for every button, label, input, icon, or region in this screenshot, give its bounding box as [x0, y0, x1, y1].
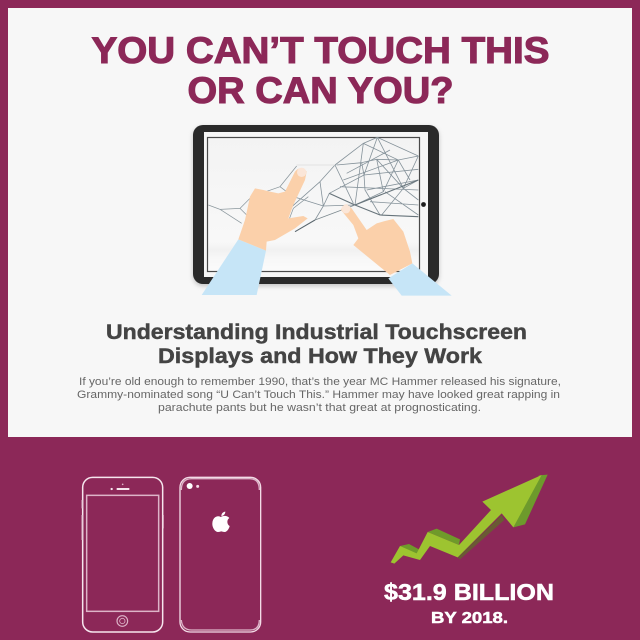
arrow head side	[513, 475, 548, 527]
icon: phone front	[82, 477, 163, 632]
intro paragraph: Grammy-nominated song “U Can’t Touch This.” Hammer may have looked great rapping in	[77, 389, 560, 401]
chart: network mesh left	[208, 166, 315, 232]
intro paragraph: If you’re old enough to remember 1990, that’s the year MC Hammer released his signature,	[79, 376, 561, 388]
panel: white intro	[8, 8, 632, 437]
title: OR CAN YOU?	[188, 70, 454, 111]
icon: phone back	[180, 477, 261, 632]
subtitle: Understanding Industrial Touchscreen	[106, 321, 527, 344]
icon: apple logo	[212, 512, 230, 532]
arrow front	[391, 475, 542, 564]
intro paragraph: parachute pants but he wasn’t that great at prognosticating.	[158, 402, 481, 414]
market stat: $31.9 BILLION	[384, 579, 554, 605]
chart: network mesh right	[290, 137, 418, 220]
title: YOU CAN’T TOUCH THIS	[92, 30, 550, 71]
market stat: BY 2018.	[431, 610, 508, 627]
market stat	[384, 579, 554, 627]
chart: growth arrow	[391, 475, 548, 564]
intro paragraph	[77, 376, 561, 414]
subtitle	[106, 321, 527, 368]
illustration: tablet with hands	[193, 125, 452, 296]
icon: phones	[82, 477, 261, 632]
icon: right hand	[341, 204, 452, 296]
subtitle: Displays and How They Work	[158, 345, 482, 368]
icon: left hand	[202, 168, 308, 295]
arrow dark top faces	[400, 529, 460, 557]
title	[92, 30, 550, 111]
icon: tablet body	[193, 125, 439, 286]
arrow shadow under shaft	[458, 515, 504, 559]
